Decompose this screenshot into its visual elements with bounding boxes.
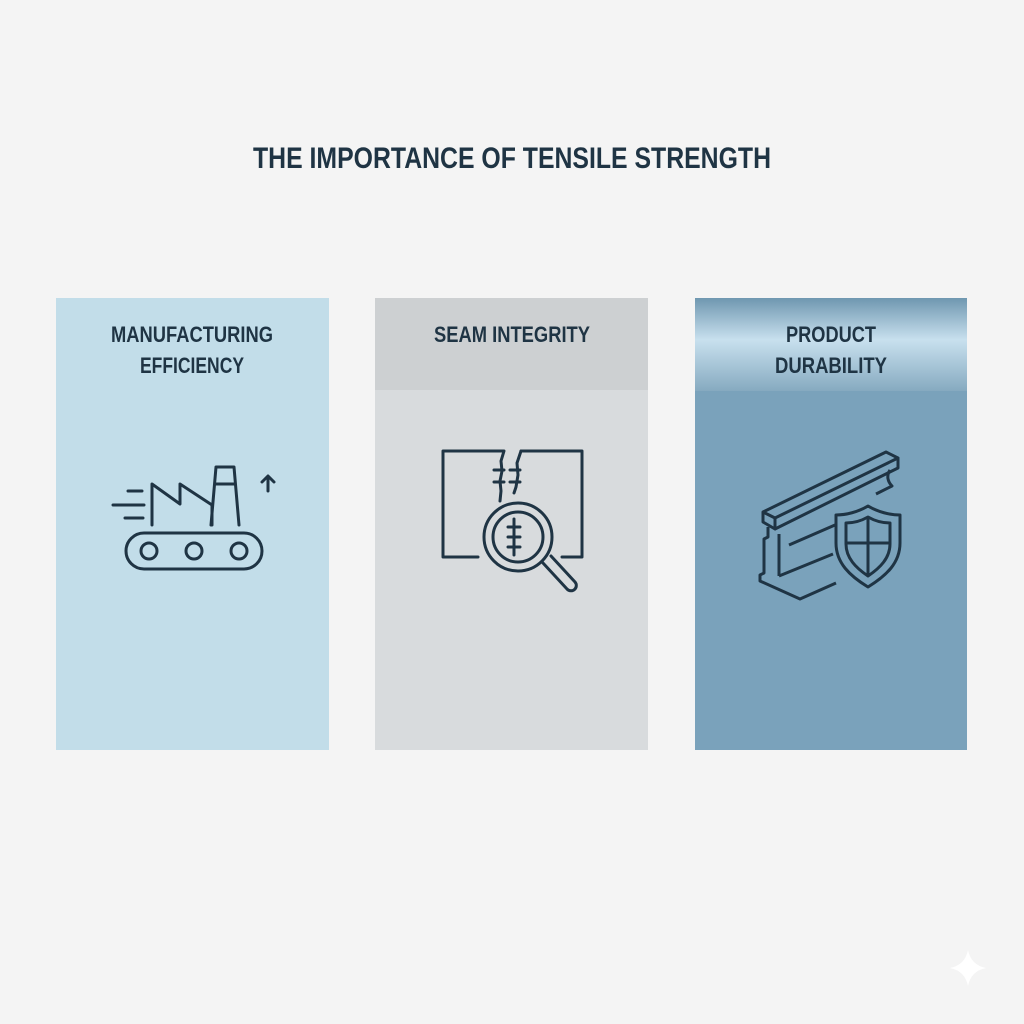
icon: factory conveyor (113, 467, 274, 569)
panel: manufacturing efficiency (56, 298, 329, 750)
panel: seam integrity (375, 298, 648, 750)
heading: product durability: PRODUCT (786, 322, 876, 347)
title: THE IMPORTANCE OF TENSILE STRENGTH (253, 142, 771, 175)
panel: product durability (695, 298, 967, 750)
icon: i-beam with shield (760, 452, 900, 599)
heading: product durability (775, 322, 887, 378)
icon: sparkle (950, 950, 986, 986)
heading: seam integrity: SEAM INTEGRITY (434, 322, 590, 347)
icon: seam magnifier (443, 451, 582, 591)
heading: manufacturing efficiency: EFFICIENCY (140, 353, 244, 378)
heading: manufacturing efficiency: MANUFACTURING (111, 322, 273, 347)
heading: product durability: DURABILITY (775, 353, 887, 378)
heading: manufacturing efficiency (111, 322, 273, 378)
